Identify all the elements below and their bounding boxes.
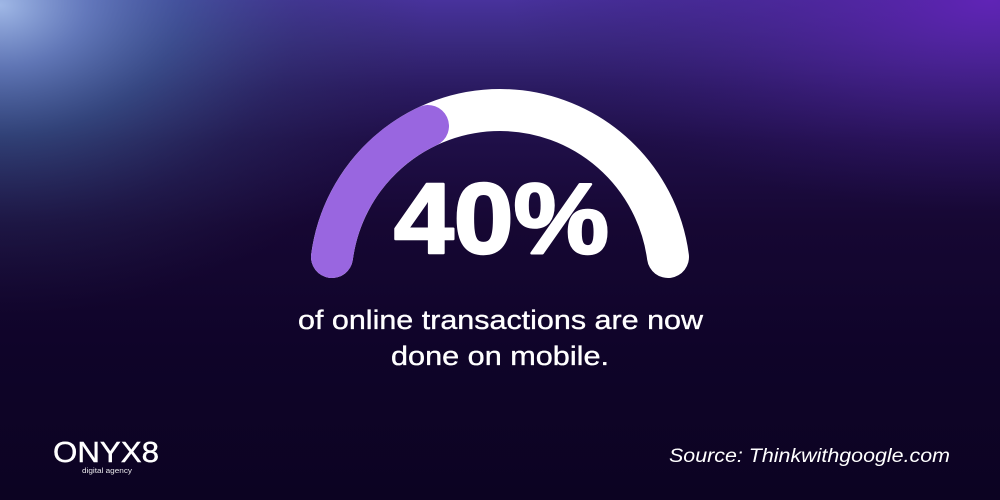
source: Source: Thinkwithgoogle.com [669, 446, 950, 467]
gauge track [332, 110, 668, 257]
logo: ONYX8 digital agency: ONYX8 [53, 437, 159, 469]
gauge chart [332, 110, 668, 257]
logo: ONYX8 digital agency: digital agency [82, 468, 133, 475]
description text: done on mobile. [391, 341, 609, 371]
gauge value 40% [332, 126, 428, 257]
description text: of online transactions are now [298, 305, 704, 335]
description text [298, 305, 704, 371]
big number: 40% [394, 163, 609, 275]
